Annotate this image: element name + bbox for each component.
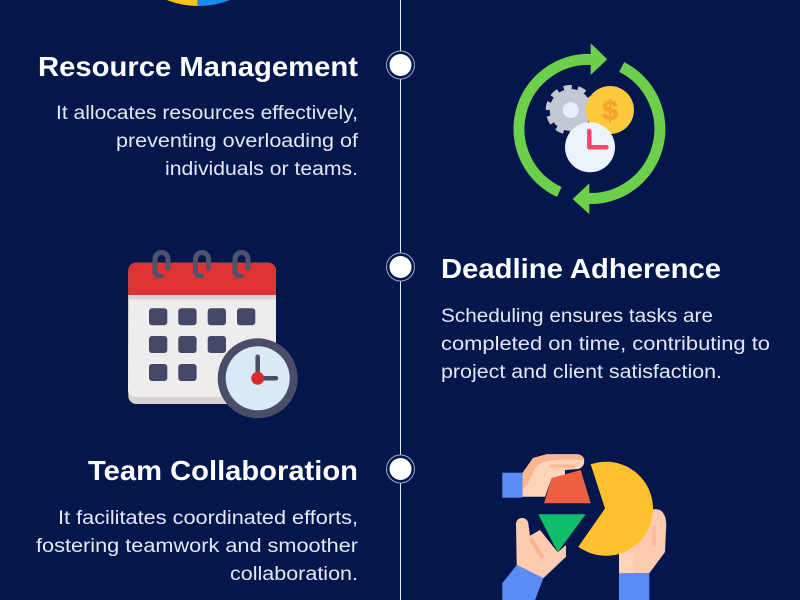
- lower right hand: [619, 509, 666, 573]
- text block: resource management: [56, 103, 359, 180]
- heading: resource management: Resource Management: [38, 51, 358, 82]
- text block: deadline adherence: completed on time, contributing to: [441, 334, 770, 355]
- text block: deadline adherence: Scheduling ensures tasks are: [441, 306, 713, 327]
- panel: resource management: [38, 51, 359, 180]
- heading: deadline adherence: Deadline Adherence: [441, 253, 721, 284]
- panel: team collaboration: [36, 455, 359, 585]
- icon: hands sharing a pie chart: [502, 454, 666, 600]
- date squares: [149, 308, 255, 381]
- icon: partial pie at top: [167, 0, 230, 6]
- text block: resource management: It allocates resources effectively,: [56, 103, 358, 124]
- icon: resource cycle with gear, coin and clock: $: [602, 95, 618, 126]
- text block: deadline adherence: project and client satisfaction.: [441, 362, 722, 383]
- heading: team collaboration: Team Collaboration: [88, 455, 358, 486]
- calendar body: [128, 263, 276, 404]
- icon: resource cycle with gear, coin and clock: [519, 43, 660, 214]
- text block: resource management: individuals or teams.: [165, 159, 358, 180]
- yellow pie: [578, 462, 653, 556]
- binding rings: [155, 253, 248, 276]
- text block: team collaboration: It facilitates coordinated efforts,: [58, 508, 358, 529]
- text block: team collaboration: [36, 508, 359, 585]
- timeline: [386, 0, 414, 600]
- icon: calendar with clock: [128, 253, 298, 418]
- green slice: [538, 514, 586, 552]
- text block: team collaboration: collaboration.: [230, 564, 358, 585]
- text block: resource management: preventing overloading of: [116, 131, 359, 152]
- text block: deadline adherence: [441, 306, 770, 383]
- panel: deadline adherence: [441, 253, 770, 383]
- top hand: [522, 454, 584, 497]
- orange slice: [544, 470, 591, 503]
- lower left hand: [516, 518, 566, 578]
- clock: [218, 338, 298, 418]
- text block: team collaboration: fostering teamwork and smoother: [36, 536, 359, 557]
